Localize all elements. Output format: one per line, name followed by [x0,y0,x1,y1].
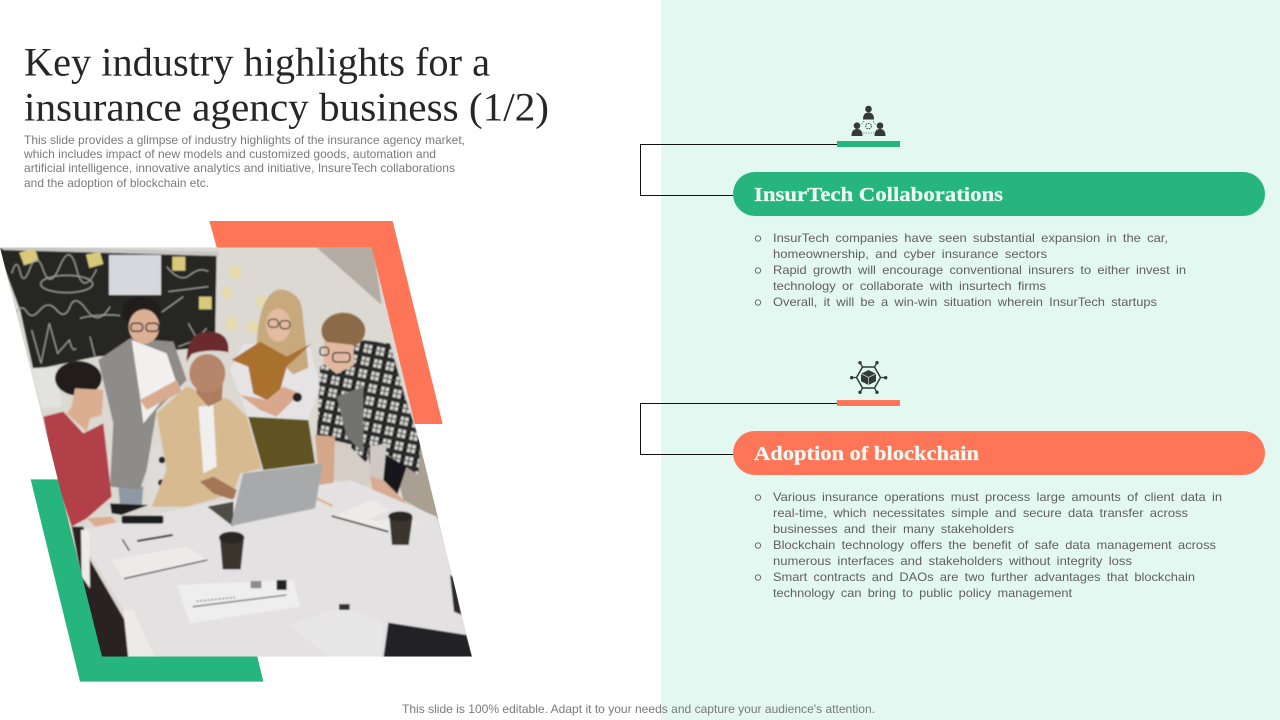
heading pill: InsurTech Collaborations [733,172,1265,216]
person: man in plaid shirt [367,443,407,497]
table [80,480,477,660]
bullet list: InsurTech [755,231,1186,309]
person: blonde woman [248,417,315,470]
bullet list: InsurTech: Overall, it will be a win-win situation wherein InsurTech startups [773,295,1157,309]
bullet list: blockchain: Smart contracts and DAOs are two further advantages that blockchain [773,570,1195,584]
accent shape: green [31,479,263,682]
bullet list: blockchain: Various insurance operations must process large amounts of client data in [773,490,1222,504]
accent bar: coral [837,400,900,406]
footer note: This slide is 100% editable. Adapt it to your needs and capture your audience's attention. [402,702,875,716]
description text: which includes impact of new models and customized goods, automation and [23,147,436,161]
bullet list: blockchain [755,490,1222,600]
accent shape: coral [209,221,443,424]
connector: blockchain [640,404,837,454]
icon: blockchain hexagon [850,361,887,394]
photo group with accent shapes [0,221,480,682]
heading pill: Adoption of blockchain: Adoption of blockchain [754,443,979,465]
bullet list: blockchain: numerous interfaces and stakeholders without integrity loss [773,554,1132,568]
title: Key industry highlights for a [24,40,490,84]
bullet list: InsurTech: InsurTech companies have seen substantial expansion in the car, [773,231,1168,245]
person: woman in grey blazer [118,487,143,505]
bullet list: InsurTech: homeownership, and cyber insurance sectors [773,247,1047,261]
bullet list: blockchain: technology can bring to public policy management [773,586,1073,600]
photo: team around a laptop [0,240,480,663]
bullet list: InsurTech: technology or collaborate with insurtech firms [773,279,1046,293]
bullet list: blockchain: real-time, which necessitates simple and secure data transfer across [773,506,1188,520]
heading pill: InsurTech Collaborations: InsurTech Collaborations [754,184,1003,206]
connector: InsurTech [640,144,837,196]
person: man in beige jacket [152,387,262,507]
description text: artificial intelligence, innovative analytics and initiative, InsureTech collaborations [24,161,455,175]
person: man in red sweater [43,412,112,527]
laptop [207,502,233,527]
bullet list: blockchain: businesses and their many stakeholders [773,522,1014,536]
description text: This slide provides a glimpse of industry highlights of the insurance agency market, [24,133,465,147]
heading pill: Adoption of blockchain [733,431,1265,475]
description text: and the adoption of blockchain etc. [24,176,209,190]
icon: people network [852,106,886,136]
bullet list: blockchain: Blockchain technology offers the benefit of safe data management across [773,538,1216,552]
description text [23,133,465,190]
panel: right mint background [661,0,1280,720]
accent bar: green [837,141,900,147]
bullet list: InsurTech: Rapid growth will encourage conventional insurers to either invest in [773,263,1186,277]
chair [147,443,173,507]
title [24,40,549,130]
title: insurance agency business (1/2) [24,84,549,130]
desk items [122,516,163,524]
